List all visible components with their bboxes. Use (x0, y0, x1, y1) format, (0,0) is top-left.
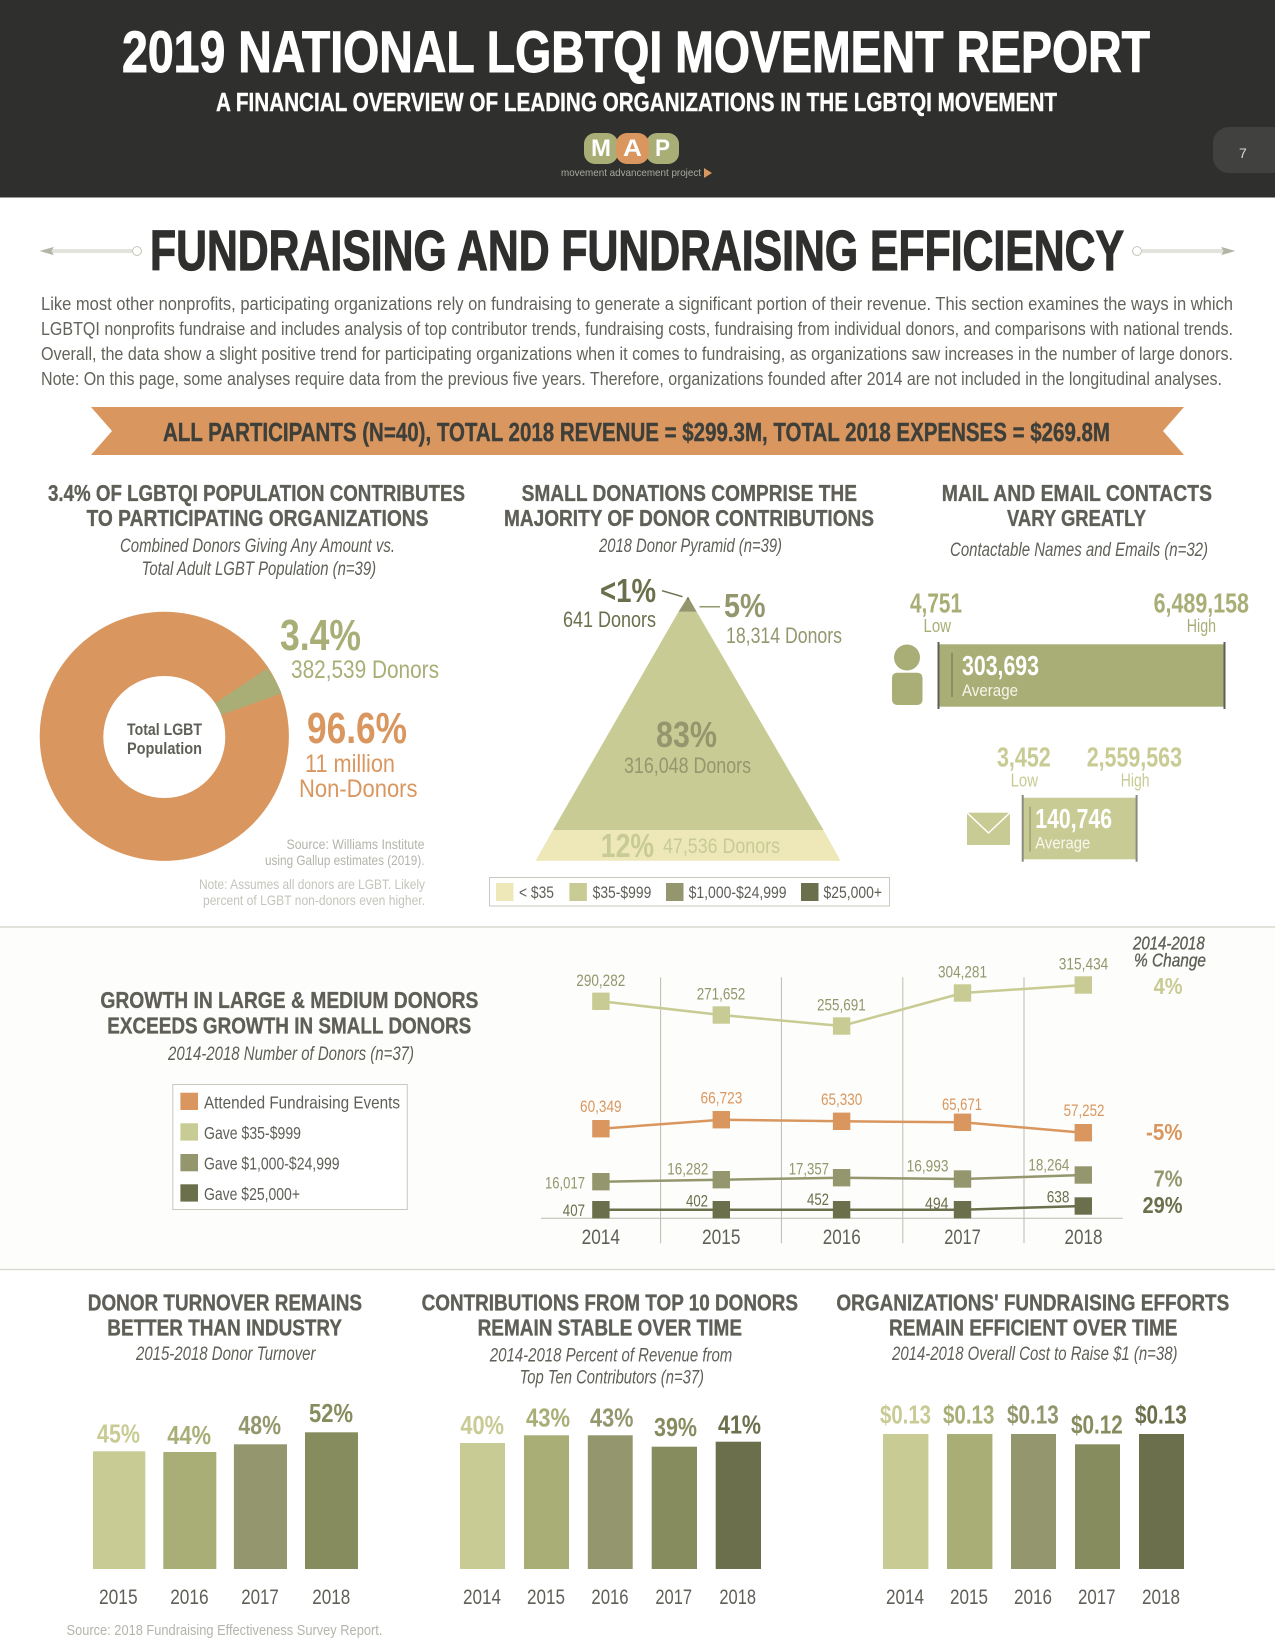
bar chart: 2016 (1014, 1586, 1052, 1609)
series: gave $35-$999: 290,282 (576, 971, 625, 990)
bar chart: 52% (309, 1398, 353, 1428)
series: gave $1,000-$24,999: 17,357 (789, 1159, 829, 1178)
chart year labels: 2014 (582, 1226, 620, 1249)
bar chart: $0.13 (1135, 1399, 1187, 1429)
chart year labels: 2016 (823, 1226, 861, 1249)
panel heading (836, 1290, 1229, 1341)
line chart legend: Gave $1,000-$24,999 (204, 1153, 340, 1173)
panel subtitle: 2014-2018 Number of Donors (n=37) (167, 1044, 414, 1065)
donut centre label: Population (127, 739, 202, 758)
bar chart: 2014 (463, 1586, 501, 1609)
panel: top ten contributions (422, 1290, 798, 1609)
series: gave $35-$999 (576, 954, 1108, 1035)
panel: donor turnover (66, 1290, 382, 1639)
source note: Source: 2018 Fundraising Effectiveness Survey Report. (66, 1623, 382, 1639)
mail contacts range: Low (924, 616, 952, 636)
panel: mail and email contacts (892, 480, 1249, 862)
MAP logo: movement advancement project (561, 167, 701, 179)
email contacts range: Low (1011, 771, 1039, 791)
series: gave $1,000-$24,999: 16,017 (545, 1173, 585, 1192)
MAP logo: M (591, 135, 611, 162)
mail contacts bar: Average (962, 681, 1018, 700)
series: gave $25,000+ (563, 1188, 1092, 1220)
pyramid legend: $25,000+ (824, 884, 882, 902)
panel subtitle: 2018 Donor Pyramid (n=39) (598, 536, 782, 557)
panel heading: MAJORITY OF DONOR CONTRIBUTIONS (504, 505, 874, 531)
series: gave $35-$999: 255,691 (817, 995, 866, 1014)
source note: percent of LGBT non-donors even higher. (203, 892, 425, 908)
chart year labels: 2015 (702, 1226, 740, 1249)
donut centre label (127, 720, 203, 758)
series: gave $1,000-$24,999: 16,993 (907, 1157, 948, 1176)
bar chart: 2017 (1078, 1586, 1116, 1609)
pyramid legend: < $35 (519, 884, 554, 902)
non-donor share callout (299, 704, 418, 803)
icon: person (892, 644, 922, 705)
pyramid value 83%: 83% (656, 714, 717, 755)
panel: donor pyramid (490, 480, 890, 906)
source note: using Gallup estimates (2019). (265, 852, 424, 868)
panel heading (504, 480, 874, 531)
MAP logo (561, 133, 712, 179)
panel heading: 3.4% OF LGBTQI POPULATION CONTRIBUTES (48, 480, 465, 506)
series: attended fundraising events (580, 1088, 1104, 1141)
percent change column: 2014-2018 (1132, 933, 1205, 953)
non-donor share callout: 96.6% (307, 704, 407, 753)
mail contacts range: 4,751 (910, 588, 962, 619)
page number tab (1213, 127, 1275, 173)
bar chart: $0.13 (943, 1399, 994, 1429)
intro paragraph (41, 294, 1233, 389)
panel subtitle: 2014-2018 Overall Cost to Raise $1 (n=38) (891, 1344, 1178, 1365)
bar chart (460, 1403, 761, 1609)
mail contacts range: High (1187, 616, 1216, 636)
panel heading: VARY GREATLY (1007, 505, 1146, 531)
callout: under 1 percent (563, 572, 682, 632)
callout: under 1 percent: 641 Donors (563, 607, 656, 632)
mail contacts bar (938, 642, 1224, 709)
panel: cost to raise a dollar (836, 1290, 1229, 1609)
pyramid value 83% (624, 714, 751, 778)
panel heading: SMALL DONATIONS COMPRISE THE (522, 480, 857, 506)
percent change column: 29% (1142, 1192, 1182, 1218)
percent change column: 7% (1154, 1166, 1182, 1192)
callout: 5 percent (700, 587, 842, 648)
mail contacts range (910, 588, 1249, 636)
line chart legend: Gave $25,000+ (204, 1184, 300, 1204)
page number tab: 7 (1239, 145, 1247, 161)
bar chart: 2017 (655, 1586, 692, 1609)
panel subtitle: 2015-2018 Donor Turnover (135, 1344, 316, 1365)
donor share callout: 382,539 Donors (291, 656, 439, 684)
bar chart: 2015 (950, 1586, 988, 1609)
source note: Source: Williams Institute (286, 836, 425, 852)
source note: Note: Assumes all donors are LGBT. Likely (199, 876, 425, 892)
bar chart: 43% (526, 1403, 570, 1433)
non-donor share callout: Non-Donors (299, 775, 418, 803)
email contacts range: 2,559,563 (1087, 742, 1182, 773)
series: gave $35-$999: 271,652 (697, 984, 745, 1003)
series: gave $1,000-$24,999: 18,264 (1028, 1156, 1069, 1175)
series: gave $25,000+: 452 (807, 1190, 829, 1209)
email contacts bar (1023, 795, 1137, 862)
line chart (541, 954, 1123, 1249)
bar chart: 2017 (241, 1586, 279, 1609)
percent change column (1132, 933, 1206, 1218)
chart year labels: 2018 (1064, 1226, 1102, 1249)
bar chart: 2016 (170, 1586, 209, 1609)
bar chart: 45% (97, 1419, 140, 1449)
series: gave $25,000+: 407 (563, 1201, 585, 1220)
pyramid legend: $1,000-$24,999 (689, 884, 787, 902)
report subtitle: A FINANCIAL OVERVIEW OF LEADING ORGANIZATIONS IN THE LGBTQI MOVEMENT (216, 87, 1057, 117)
email contacts range: High (1121, 771, 1150, 791)
series: attended fundraising events: 65,671 (942, 1095, 982, 1114)
pyramid legend (490, 878, 890, 906)
panel heading (422, 1290, 798, 1341)
callout: under 1 percent: <1% (600, 572, 656, 609)
ribbon banner (91, 407, 1184, 455)
bar chart: 48% (238, 1410, 281, 1440)
series: attended fundraising events: 65,330 (821, 1090, 862, 1109)
panel heading: TO PARTICIPATING ORGANIZATIONS (86, 505, 428, 531)
series: attended fundraising events: 66,723 (700, 1088, 742, 1107)
panel: LGBTQI population contributions (40, 480, 465, 908)
panel subtitle: Contactable Names and Emails (n=32) (950, 540, 1208, 561)
panel heading (48, 480, 465, 531)
bar chart: 43% (590, 1403, 634, 1433)
non-donor share callout: 11 million (305, 750, 395, 778)
panel heading: REMAIN EFFICIENT OVER TIME (889, 1315, 1178, 1341)
bar chart: 2018 (1142, 1586, 1180, 1609)
line chart legend: Attended Fundraising Events (204, 1092, 400, 1112)
panel heading: CONTRIBUTIONS FROM TOP 10 DONORS (422, 1290, 798, 1316)
pyramid value 12% (601, 827, 780, 864)
bar chart: 2015 (99, 1586, 138, 1609)
series: gave $1,000-$24,999: 16,282 (667, 1159, 708, 1178)
pyramid value 12%: 12% (601, 827, 654, 864)
mail contacts range: 6,489,158 (1154, 588, 1249, 619)
series: gave $25,000+: 494 (925, 1194, 948, 1213)
series: gave $25,000+: 638 (1047, 1188, 1069, 1207)
bar chart: 40% (460, 1410, 504, 1440)
donor share callout: 3.4% (280, 611, 361, 660)
percent change column: 4% (1154, 973, 1182, 999)
donut centre label: Total LGBT (127, 720, 203, 739)
percent change column: % Change (1134, 951, 1206, 971)
panel heading (942, 480, 1212, 531)
donut chart (40, 612, 289, 861)
icon: envelope (967, 813, 1010, 845)
panel subtitle (489, 1346, 732, 1388)
series: attended fundraising events: 60,349 (580, 1097, 622, 1116)
panel subtitle: Top Ten Contributors (n=37) (520, 1367, 704, 1388)
line chart legend (173, 1084, 407, 1210)
bar chart: 2014 (886, 1586, 924, 1609)
panel heading: GROWTH IN LARGE & MEDIUM DONORS (100, 987, 478, 1013)
bar chart (880, 1399, 1187, 1609)
pyramid value 12%: 47,536 Donors (663, 835, 780, 858)
panel heading: MAIL AND EMAIL CONTACTS (942, 480, 1212, 506)
series: attended fundraising events: 57,252 (1064, 1101, 1104, 1120)
panel heading: REMAIN STABLE OVER TIME (478, 1315, 742, 1341)
MAP logo: A (623, 135, 642, 162)
series: gave $25,000+: 402 (686, 1192, 708, 1211)
pyramid chart (536, 597, 840, 864)
source note (199, 836, 425, 908)
panel subtitle: Combined Donors Giving Any Amount vs. (120, 536, 395, 557)
bar chart: $0.13 (1007, 1399, 1059, 1429)
percent change column: -5% (1146, 1119, 1182, 1145)
bar chart: 2015 (527, 1586, 565, 1609)
bar chart (93, 1398, 358, 1609)
email contacts range (997, 742, 1182, 791)
bar chart: 2016 (591, 1586, 629, 1609)
right arrow ornament (1133, 247, 1234, 255)
left arrow ornament (41, 247, 141, 255)
panel subtitle: Total Adult LGBT Population (n=39) (142, 559, 376, 580)
line chart legend: Gave $35-$999 (204, 1123, 301, 1143)
email contacts bar: 140,746 (1035, 803, 1112, 834)
panel heading: BETTER THAN INDUSTRY (107, 1315, 342, 1341)
panel: donor growth (0, 926, 1275, 1270)
panel heading: EXCEEDS GROWTH IN SMALL DONORS (107, 1013, 471, 1039)
mail contacts bar: 303,693 (962, 650, 1039, 681)
bar chart: 39% (654, 1412, 697, 1442)
panel heading: DONOR TURNOVER REMAINS (88, 1290, 362, 1316)
panel subtitle: 2014-2018 Percent of Revenue from (489, 1346, 732, 1367)
bar chart: 44% (167, 1420, 211, 1450)
bar chart: $0.13 (880, 1399, 931, 1429)
callout: 5 percent: 18,314 Donors (726, 623, 842, 648)
email contacts bar: Average (1035, 833, 1090, 852)
bar chart: $0.12 (1071, 1409, 1123, 1439)
bar chart: 41% (718, 1409, 761, 1439)
chart year labels (582, 1226, 1102, 1249)
bar chart: 2018 (719, 1586, 756, 1609)
MAP logo: P (655, 135, 670, 162)
chart year labels: 2017 (944, 1226, 981, 1249)
series: gave $35-$999: 304,281 (938, 962, 987, 981)
panel heading (88, 1290, 362, 1341)
pyramid value 83%: 316,048 Donors (624, 753, 751, 778)
panel subtitle (120, 536, 395, 580)
panel heading (100, 987, 478, 1039)
pyramid legend: $35-$999 (593, 884, 651, 902)
donor share callout (280, 611, 439, 684)
email contacts range: 3,452 (997, 742, 1051, 773)
callout: 5 percent: 5% (724, 587, 766, 624)
series: gave $35-$999: 315,434 (1059, 954, 1108, 973)
series: gave $1,000-$24,999 (545, 1156, 1092, 1192)
header band (0, 0, 1275, 198)
bar chart: 2018 (312, 1586, 350, 1609)
